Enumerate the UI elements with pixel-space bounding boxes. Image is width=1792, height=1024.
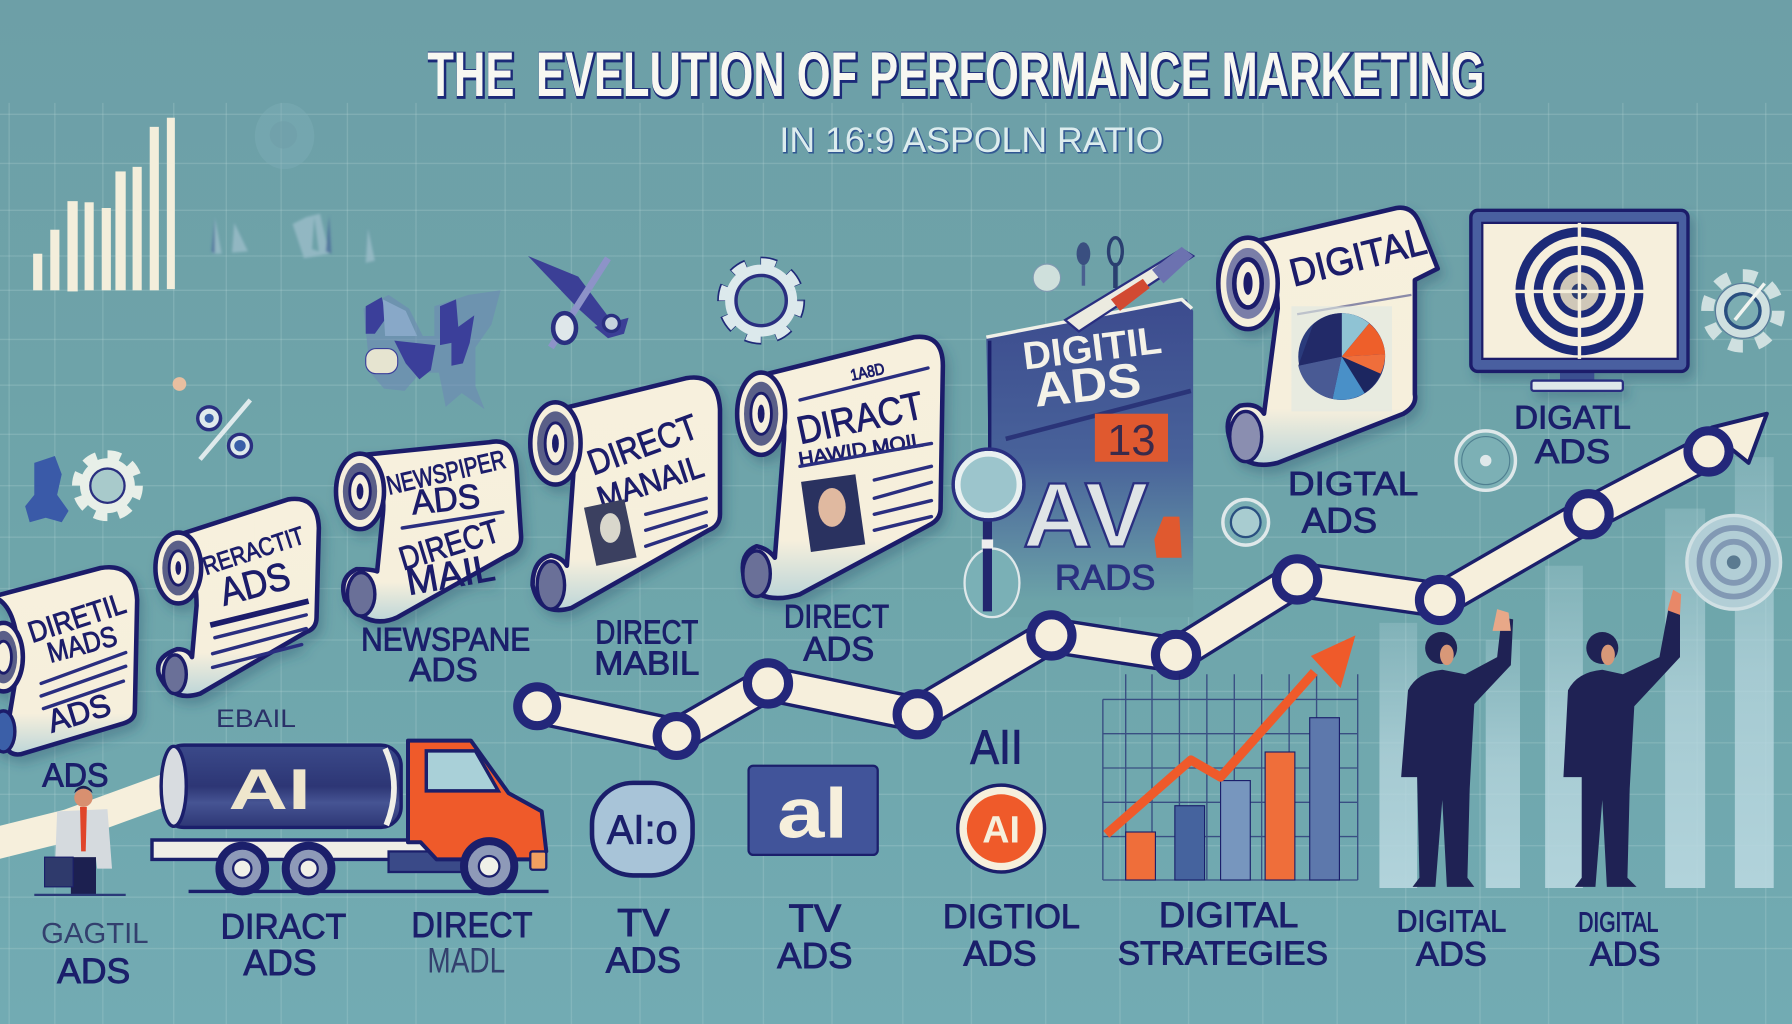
scroll 3: newspaper ads direct mail — [336, 441, 521, 621]
label: gagtil ads: ADS — [57, 951, 130, 991]
scroll 4: direct manail: MANAIL — [593, 448, 708, 516]
label: digtal ads: ADS — [1302, 501, 1377, 541]
scroll 2: reractit ads: ADS — [215, 555, 295, 614]
label: digital ads two — [1578, 906, 1661, 974]
scroll 2: reractit ads — [155, 499, 319, 696]
label: direct ads: DIRECT — [784, 598, 889, 634]
icon: orange truck with AI tank — [152, 741, 549, 891]
label: tv ads two — [777, 897, 853, 976]
icon: blue blob and gear — [25, 456, 137, 522]
label: tv ads two: TV — [789, 897, 841, 940]
icon: AI round badge: AI:o — [607, 806, 678, 852]
label: tv ads two: ADS — [777, 935, 853, 976]
label: diract ads: DIRACT — [221, 906, 346, 946]
line tail — [0, 789, 169, 843]
label: direct madl — [411, 905, 533, 981]
scroll 6: digital with pie: DIGITAL — [1285, 220, 1431, 295]
label: ads left: ADS — [42, 757, 109, 794]
title — [427, 40, 1486, 111]
label: rads: RADS — [1055, 558, 1155, 598]
label: diract ads: ADS — [243, 942, 317, 983]
text: large AV: AV — [1023, 464, 1149, 566]
label: digital ads one: DIGITAL — [1397, 903, 1506, 938]
icon: AI blue box — [749, 766, 878, 855]
scroll 5: direct mail: DIRACT — [793, 384, 927, 453]
icon: businessman left — [1401, 609, 1513, 887]
subtitle: IN 16:9 ASPOLN RATIO — [781, 121, 1165, 161]
label: newspane ads — [361, 621, 530, 689]
label: direct mabil — [594, 614, 699, 682]
scroll 6: digital with pie — [1218, 208, 1438, 465]
scroll 1: direct mail ads: ADS — [43, 686, 115, 739]
scroll 4: direct manail: DIRECT — [582, 406, 703, 483]
icon: monitor with target — [1471, 210, 1688, 391]
label: digital ads two: DIGITAL — [1578, 906, 1658, 937]
label: digital ads one — [1397, 903, 1506, 974]
chart: bars with rising arrow — [1103, 635, 1358, 880]
label: direct ads — [784, 598, 889, 669]
scroll 5: direct mail — [737, 337, 943, 598]
title: THE — [429, 41, 515, 111]
icon: businessman with briefcase — [34, 786, 126, 896]
icon: orange tag — [1154, 517, 1182, 558]
scroll 1: direct mail ads — [0, 567, 137, 754]
icon: gear right — [1707, 275, 1778, 346]
label: direct mabil: DIRECT — [595, 614, 698, 651]
label: digital strategies — [1118, 895, 1328, 973]
label: gagtil ads — [41, 918, 149, 991]
label: digtiol ads: ADS — [963, 934, 1037, 974]
icon: AI round badge — [592, 783, 693, 875]
label: digtiol ads — [943, 898, 1080, 974]
title: THE — [427, 40, 514, 110]
label: digital strategies: STRATEGIES — [1118, 936, 1328, 973]
scroll 3: newspaper ads direct mail: ADS — [410, 477, 482, 522]
icon: small tools — [1033, 238, 1122, 291]
panel: blue digital ads book: ADS — [1031, 354, 1144, 418]
scroll 5: direct mail: HAWID MOIL — [797, 429, 925, 471]
bar chart: faded top left — [33, 118, 175, 291]
label: direct mabil: MABIL — [594, 645, 699, 682]
label: tv ads one — [606, 902, 681, 981]
label: tv ads one: TV — [617, 902, 670, 945]
icon: faded circle — [255, 103, 314, 169]
label: tv ads one: ADS — [606, 940, 681, 981]
scroll 3: newspaper ads direct mail: DIRECT — [395, 513, 504, 578]
icon: magnifier — [953, 449, 1024, 617]
label: gagtil ads: GAGTIL — [41, 918, 149, 950]
icon: gear — [725, 264, 798, 337]
scroll 3: newspaper ads direct mail: NEWSPIPER — [384, 444, 508, 501]
scroll 2: reractit ads: RERACTIT — [199, 522, 308, 581]
icon: pen brush — [1065, 247, 1193, 331]
label: digatl ads — [1514, 400, 1631, 471]
icon: percent — [173, 377, 251, 459]
label: newspane ads: ADS — [409, 652, 478, 689]
icon: AI blue box: al — [777, 775, 848, 854]
icon: small play badge — [1223, 499, 1269, 545]
scroll 5: direct mail: 1A8D — [849, 361, 886, 385]
label: ebail: EBAIL — [216, 705, 296, 733]
label: digtal ads — [1288, 466, 1418, 541]
icon: AI orange circle: AI — [982, 808, 1020, 850]
panel: blue digital ads book: 13 — [1107, 417, 1156, 465]
label: digtiol ads: DIGTIOL — [943, 898, 1080, 936]
icon: faded marks — [211, 214, 375, 263]
label: all: AII — [970, 721, 1023, 774]
panel: blue digital ads book — [986, 299, 1193, 617]
chart: pie — [1298, 313, 1385, 400]
label: direct madl: DIRECT — [411, 905, 533, 945]
icon: dark blob with roll — [363, 290, 501, 409]
icon: faded target — [1687, 515, 1781, 609]
icon: AI orange circle — [958, 785, 1045, 872]
scroll 4: direct manail — [530, 378, 720, 610]
subtitle: IN 16:9 ASPOLN RATIO — [779, 120, 1163, 160]
label: digatl ads: DIGATL — [1514, 400, 1631, 436]
label: digital ads one: ADS — [1416, 936, 1487, 974]
icon: scissors — [528, 256, 629, 347]
label: digtal ads: DIGTAL — [1288, 466, 1418, 503]
scroll 1: direct mail ads: MADS — [44, 620, 121, 670]
label: digatl ads: ADS — [1535, 433, 1610, 471]
background rising bars — [1379, 457, 1774, 888]
label: diract ads — [221, 906, 346, 983]
icon: orange truck with AI tank: AI — [229, 758, 311, 822]
label: newspane ads: NEWSPANE — [361, 621, 530, 657]
icon: circle medallion — [1456, 431, 1515, 490]
label: digital ads two: ADS — [1590, 936, 1661, 974]
label: direct madl: MADL — [427, 941, 505, 981]
label: direct ads: ADS — [803, 631, 874, 669]
label: digital strategies: DIGITAL — [1159, 895, 1298, 935]
icon: businessman right — [1563, 590, 1681, 887]
scroll 3: newspaper ads direct mail: MAIL — [403, 546, 498, 603]
growth line with nodes and arrow — [518, 414, 1767, 755]
scroll 1: direct mail ads: DIRETIL — [24, 587, 130, 650]
panel: blue digital ads book: DIGITIL — [1020, 319, 1164, 379]
